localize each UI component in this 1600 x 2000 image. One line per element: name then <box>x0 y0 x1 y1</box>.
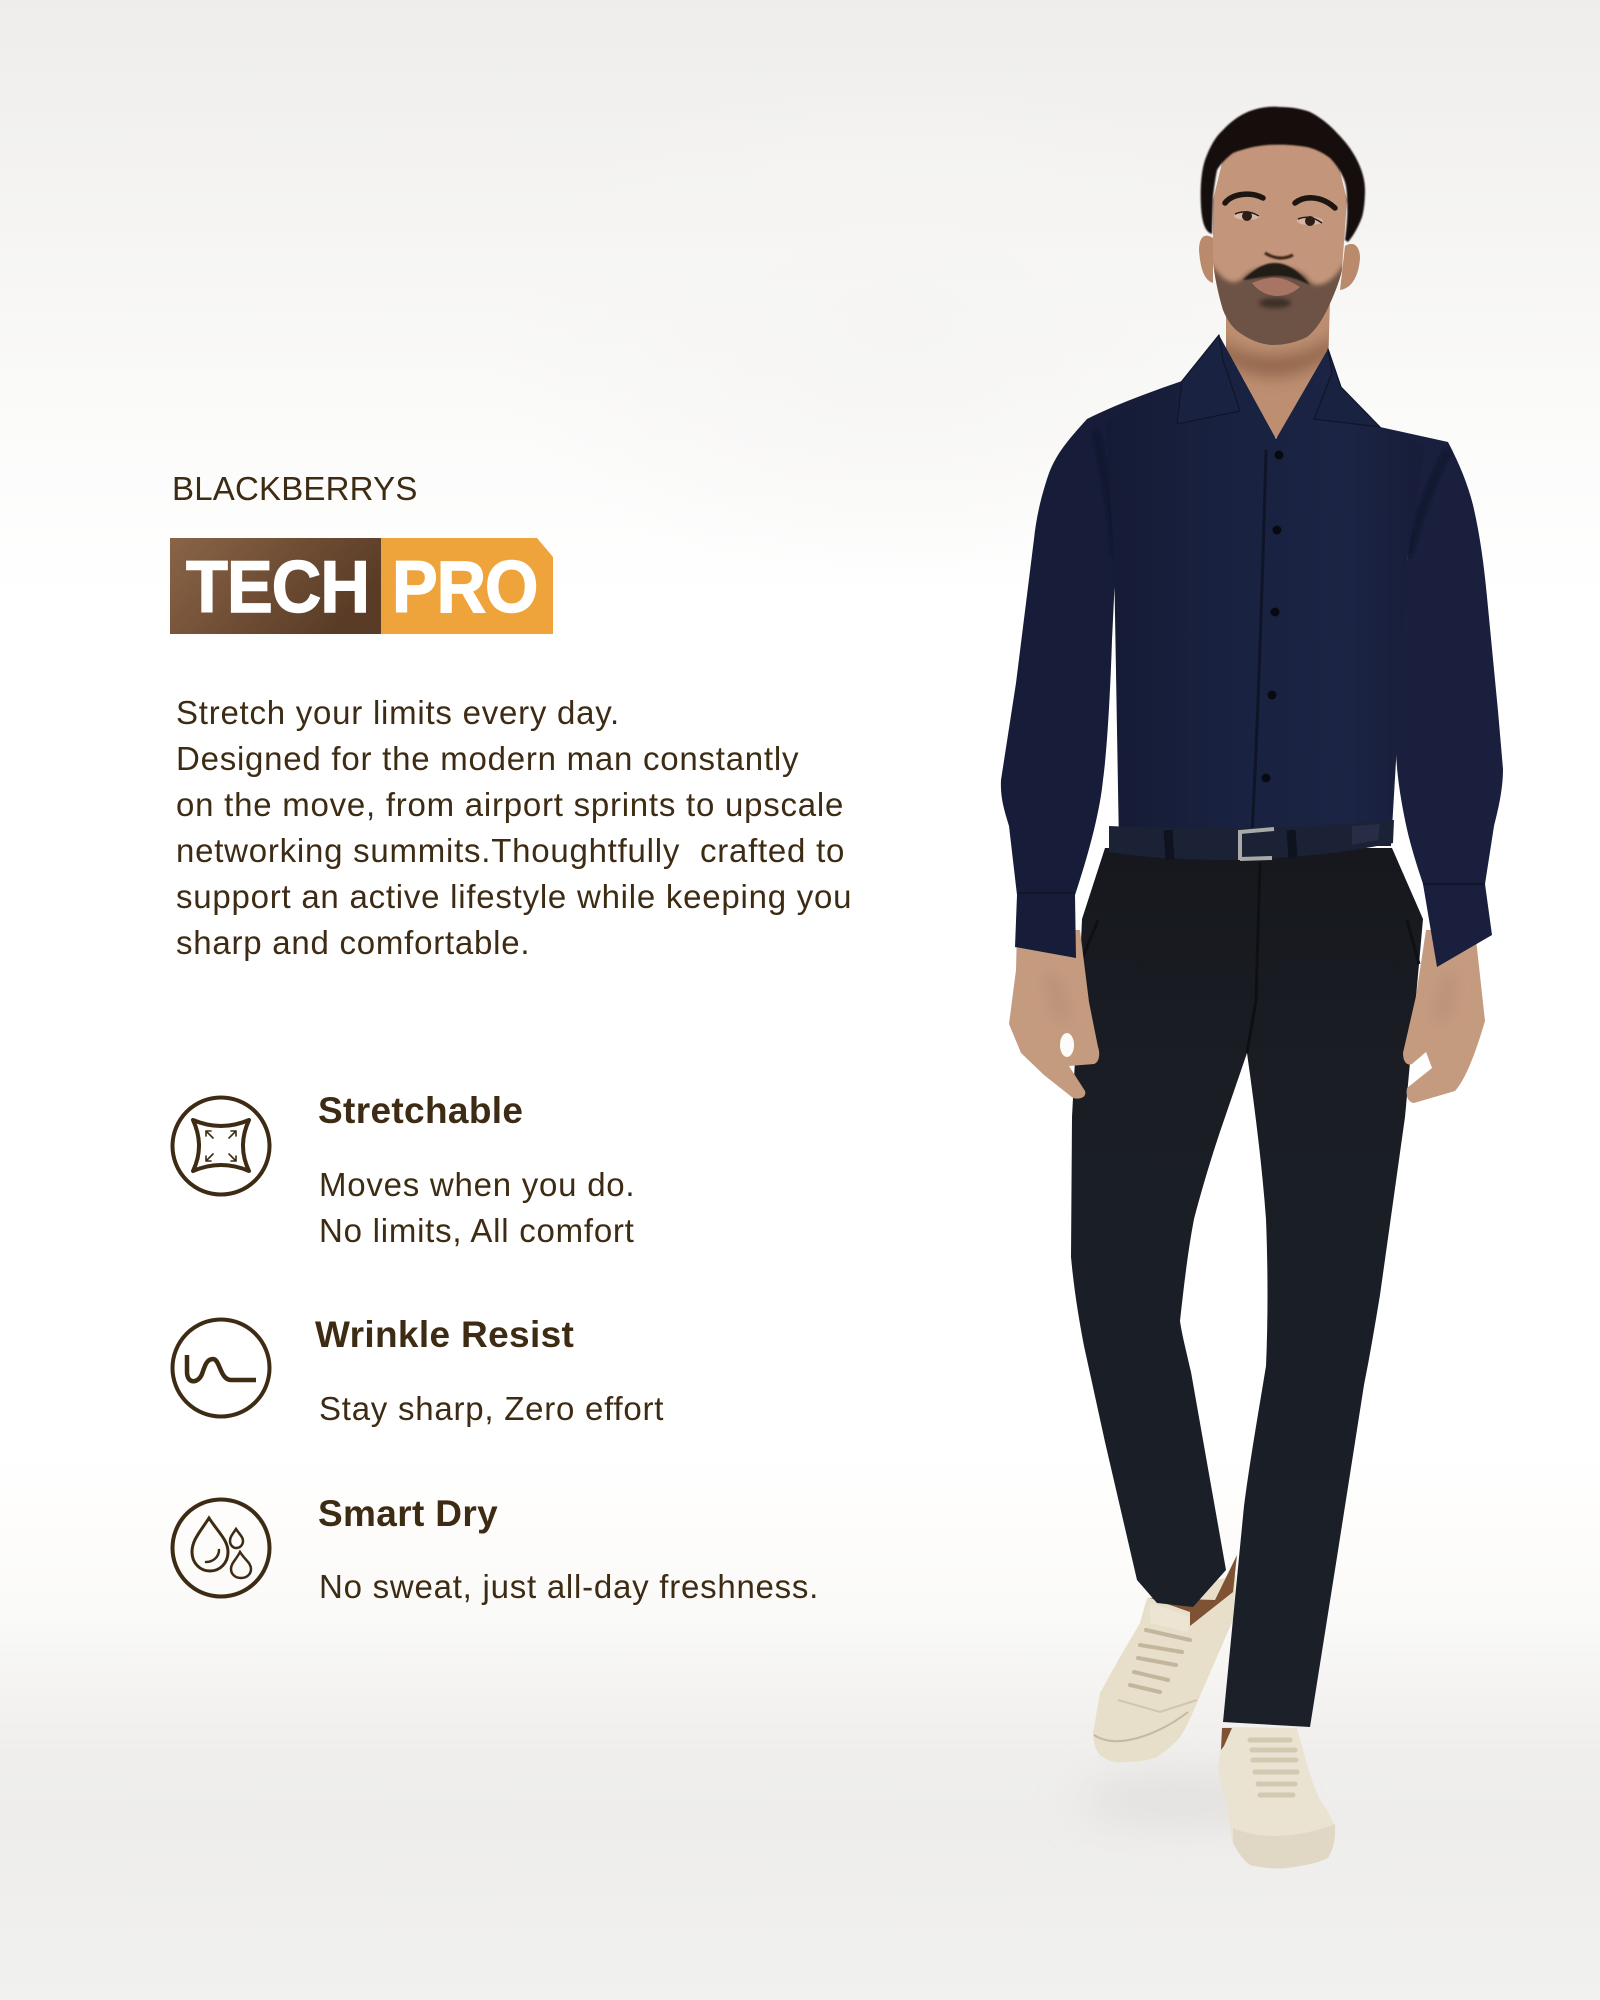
intro paragraph: support an active lifestyle while keeping you <box>176 878 852 915</box>
collar <box>1177 335 1380 427</box>
hair <box>1201 107 1365 242</box>
description: No limits, All comfort <box>319 1212 635 1249</box>
brand name: BLACKBERRYS <box>172 470 418 507</box>
description: Moves when you do. <box>319 1166 635 1203</box>
intro paragraph: sharp and comfortable. <box>176 924 530 961</box>
logo: Tech Pro badge: PRO <box>392 547 537 628</box>
trouser pockets and fly <box>1080 862 1419 1053</box>
feature: Wrinkle Resist <box>172 1314 664 1427</box>
beard <box>1210 262 1345 350</box>
hands <box>1009 930 1485 1103</box>
heading: Stretchable <box>318 1090 523 1131</box>
buttons <box>1262 450 1284 782</box>
shirt body <box>1105 335 1425 846</box>
logo: Tech Pro badge: TECH <box>186 547 369 628</box>
belt <box>1109 820 1394 860</box>
neck <box>1226 304 1330 438</box>
description <box>319 1166 635 1249</box>
trousers <box>1071 848 1423 1727</box>
lips <box>1252 278 1300 296</box>
placket <box>1252 450 1266 835</box>
feature: Smart Dry <box>172 1493 819 1605</box>
icon: stretch cushion <box>172 1098 270 1194</box>
icon: water drops <box>172 1500 270 1596</box>
intro paragraph: Designed for the modern man constantly <box>176 740 799 777</box>
shoe shadow <box>1080 1774 1280 1826</box>
shoes <box>1093 1555 1335 1868</box>
description: Stay sharp, Zero effort <box>319 1390 664 1427</box>
heading: Wrinkle Resist <box>315 1314 574 1355</box>
arm: left sleeve <box>1001 381 1182 958</box>
description: No sweat, just all-day freshness. <box>319 1568 819 1605</box>
icon: wrinkle line <box>172 1320 270 1416</box>
arm: right sleeve <box>1380 427 1503 967</box>
intro paragraph: on the move, from airport sprints to upscale <box>176 786 844 823</box>
heading: Smart Dry <box>318 1493 498 1534</box>
intro paragraph: networking summits.Thoughtfully crafted to <box>176 832 845 869</box>
intro paragraph: Stretch your limits every day. <box>176 694 620 731</box>
head <box>1199 107 1365 350</box>
photo: male model <box>1001 107 1503 1868</box>
brows and eyes <box>1225 194 1335 208</box>
feature: Stretchable <box>172 1090 635 1249</box>
logo: Tech Pro badge <box>170 538 553 634</box>
intro paragraph <box>176 694 852 961</box>
hand gap <box>1060 1033 1074 1057</box>
nose <box>1265 253 1293 258</box>
